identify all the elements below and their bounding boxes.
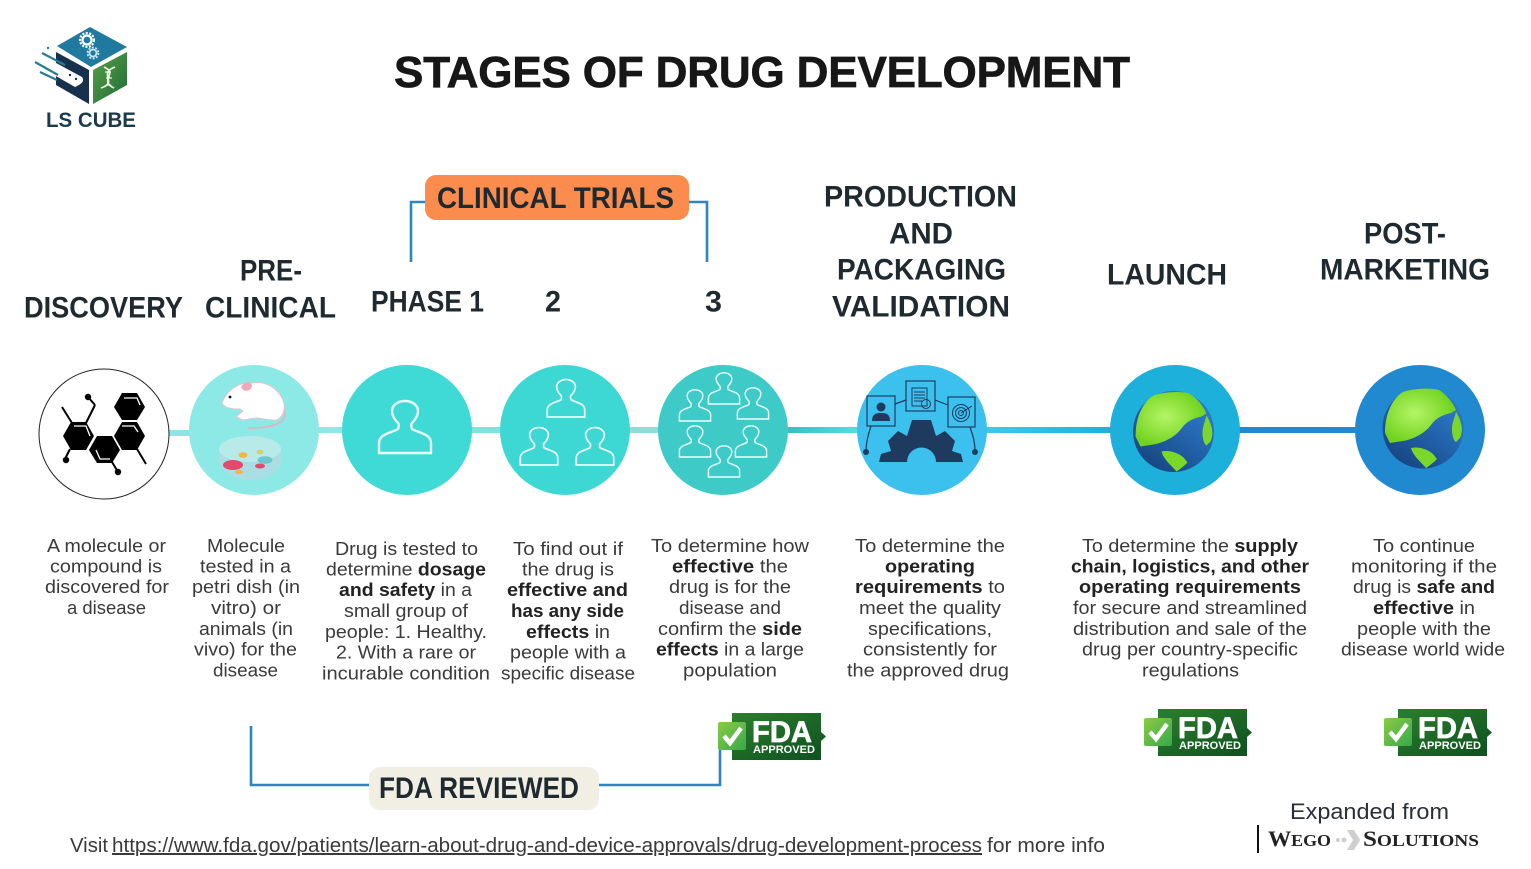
heading: post-marketing: MARKETING bbox=[1320, 254, 1490, 286]
text: discovery: A molecule or bbox=[47, 535, 166, 556]
text: phase 3: effective the bbox=[672, 556, 788, 576]
heading: phase 1: PHASE 1 bbox=[371, 286, 484, 318]
text: phase 1: incurable condition bbox=[322, 662, 490, 684]
badge: FDA approved launch: FDA bbox=[1178, 712, 1238, 745]
text: production: the approved drug bbox=[847, 660, 1009, 680]
text: phase 2: specific disease bbox=[501, 662, 635, 684]
clinical trials bracket bbox=[411, 175, 707, 262]
text: production: To determine the bbox=[855, 535, 1005, 556]
text: launch: To determine the supply bbox=[1082, 535, 1299, 556]
text: launch: regulations bbox=[1142, 660, 1239, 680]
badge: FDA approved post-marketing: FDA bbox=[1418, 712, 1478, 745]
badge: FDA approved launch: APPROVED bbox=[1179, 740, 1241, 752]
circle: phase 2 bbox=[500, 365, 630, 495]
text: phase 2 bbox=[501, 538, 635, 684]
heading: production and packaging validation bbox=[824, 180, 1017, 324]
text: pre-clinical: tested in a bbox=[200, 556, 292, 576]
text: launch: for secure and streamlined bbox=[1073, 597, 1307, 618]
text: phase 3: disease and bbox=[679, 597, 781, 618]
footer source link: https://www.fda.gov/patients/learn-about-drug-and-device-approvals/drug-development-process bbox=[112, 835, 982, 857]
heading: production and packaging validation: AND bbox=[889, 218, 953, 250]
text: production: meet the quality bbox=[859, 597, 1002, 618]
text: pre-clinical: vivo) for the bbox=[194, 638, 297, 660]
text: post-marketing: To continue bbox=[1373, 535, 1475, 556]
text: launch bbox=[1071, 535, 1309, 680]
timeline connector bbox=[165, 427, 1358, 433]
footer source link: for more info bbox=[987, 835, 1105, 857]
attribution: Wego Solutions bbox=[1258, 799, 1479, 853]
text: pre-clinical: disease bbox=[213, 660, 278, 680]
heading: pre-clinical: CLINICAL bbox=[205, 292, 336, 324]
badge: FDA approved post-marketing: APPROVED bbox=[1419, 740, 1481, 752]
circle: pre-clinical mouse and petri dish bbox=[189, 365, 319, 495]
text: launch: distribution and sale of the bbox=[1073, 618, 1307, 639]
text: phase 1: and safety in a bbox=[339, 579, 473, 600]
text: phase 1: determine dosage bbox=[326, 558, 486, 580]
text: launch: operating requirements bbox=[1079, 576, 1301, 597]
text: phase 1 bbox=[322, 538, 490, 684]
text: production: operating bbox=[885, 556, 975, 576]
heading: post-marketing: POST- bbox=[1364, 218, 1446, 250]
heading: phase 3: 3 bbox=[705, 286, 722, 318]
circle: production validation bbox=[857, 365, 987, 495]
icon: petri dish bbox=[218, 436, 282, 480]
text: phase 2: effects in bbox=[526, 621, 610, 642]
heading: pre-clinical: PRE- bbox=[240, 254, 302, 288]
badge: FDA approved launch bbox=[1144, 709, 1252, 756]
text: phase 3: drug is for the bbox=[669, 576, 791, 597]
clinical trials label: CLINICAL TRIALS bbox=[437, 182, 674, 215]
icon: mouse bbox=[222, 382, 285, 428]
text: phase 2: To find out if bbox=[513, 538, 624, 559]
text: phase 1: 2. With a rare or bbox=[336, 642, 476, 662]
FDA reviewed label: FDA REVIEWED bbox=[379, 772, 579, 805]
FDA reviewed bracket bbox=[251, 726, 720, 810]
text: post-marketing: people with the bbox=[1357, 618, 1491, 639]
attribution: Wego Solutions: Expanded from bbox=[1290, 799, 1449, 824]
text: phase 1: Drug is tested to bbox=[335, 538, 478, 559]
badge: FDA approved phase 3: FDA bbox=[752, 716, 812, 749]
text: production: requirements to bbox=[855, 576, 1005, 597]
circle: discovery molecule bbox=[39, 369, 169, 499]
text: phase 1: people: 1. Healthy. bbox=[325, 621, 487, 642]
text: phase 2: people with a bbox=[510, 642, 627, 662]
text: discovery: compound is bbox=[50, 556, 162, 576]
footer source link: Visit bbox=[70, 835, 108, 857]
circle: launch globe bbox=[1110, 365, 1240, 495]
text: pre-clinical: vitro) or bbox=[211, 597, 281, 618]
heading: production and packaging validation: PACKAGING bbox=[837, 254, 1006, 286]
text: production: specifications, bbox=[868, 618, 992, 639]
text: post-marketing: effective in bbox=[1373, 597, 1475, 618]
text: pre-clinical bbox=[192, 535, 300, 680]
attribution: Wego Solutions: SOLUTIONS bbox=[1363, 826, 1479, 851]
text: phase 2: the drug is bbox=[522, 558, 614, 580]
text: phase 3: confirm the side bbox=[658, 618, 802, 639]
circle: phase 3 bbox=[658, 365, 788, 495]
text: phase 3 bbox=[651, 535, 810, 680]
text: phase 2: effective and bbox=[507, 579, 628, 600]
text: phase 3: To determine how bbox=[651, 535, 810, 556]
text: phase 3: effects in a large bbox=[656, 638, 804, 660]
logo: LS Cube bbox=[35, 27, 136, 132]
heading: post-marketing bbox=[1320, 218, 1490, 286]
heading: phase 2: 2 bbox=[545, 286, 561, 318]
circle: phase 1 bbox=[342, 365, 472, 495]
text: phase 1: small group of bbox=[344, 600, 469, 621]
badge: FDA approved phase 3 bbox=[718, 713, 826, 760]
heading: production and packaging validation: VALIDATION bbox=[832, 290, 1010, 324]
text: launch: chain, logistics, and other bbox=[1071, 556, 1309, 576]
heading: launch: LAUNCH bbox=[1107, 258, 1227, 292]
text: post-marketing: drug is safe and bbox=[1353, 576, 1495, 597]
text: phase 2: has any side bbox=[511, 600, 624, 621]
text: phase 3: population bbox=[683, 660, 777, 680]
text: post-marketing bbox=[1341, 535, 1505, 660]
badge: FDA approved phase 3: APPROVED bbox=[753, 744, 815, 756]
attribution: Wego Solutions: WEGO bbox=[1268, 826, 1331, 851]
title: STAGES OF DRUG DEVELOPMENT bbox=[394, 48, 1130, 97]
logo wordmark: LS CUBE bbox=[46, 109, 136, 132]
text: discovery: discovered for bbox=[45, 576, 169, 597]
text: pre-clinical: Molecule bbox=[207, 535, 285, 556]
text: pre-clinical: animals (in bbox=[199, 618, 293, 639]
heading: discovery: DISCOVERY bbox=[24, 292, 183, 324]
clinical trials label bbox=[425, 175, 689, 220]
text: post-marketing: monitoring if the bbox=[1351, 556, 1497, 576]
text: production: consistently for bbox=[863, 638, 997, 660]
heading: production and packaging validation: PRODUCTION bbox=[824, 180, 1017, 214]
text: discovery bbox=[45, 535, 169, 618]
text: production bbox=[847, 535, 1009, 680]
text: pre-clinical: petri dish (in bbox=[192, 576, 300, 597]
text: post-marketing: disease world wide bbox=[1341, 638, 1505, 660]
icon: gear bbox=[879, 420, 963, 462]
stage headings bbox=[24, 180, 1490, 324]
heading: pre-clinical bbox=[205, 254, 336, 324]
text: discovery: a disease bbox=[67, 597, 146, 618]
text: launch: drug per country-specific bbox=[1082, 638, 1298, 660]
badge: FDA approved post-marketing bbox=[1384, 709, 1492, 756]
circle: post-marketing globe bbox=[1355, 365, 1485, 495]
